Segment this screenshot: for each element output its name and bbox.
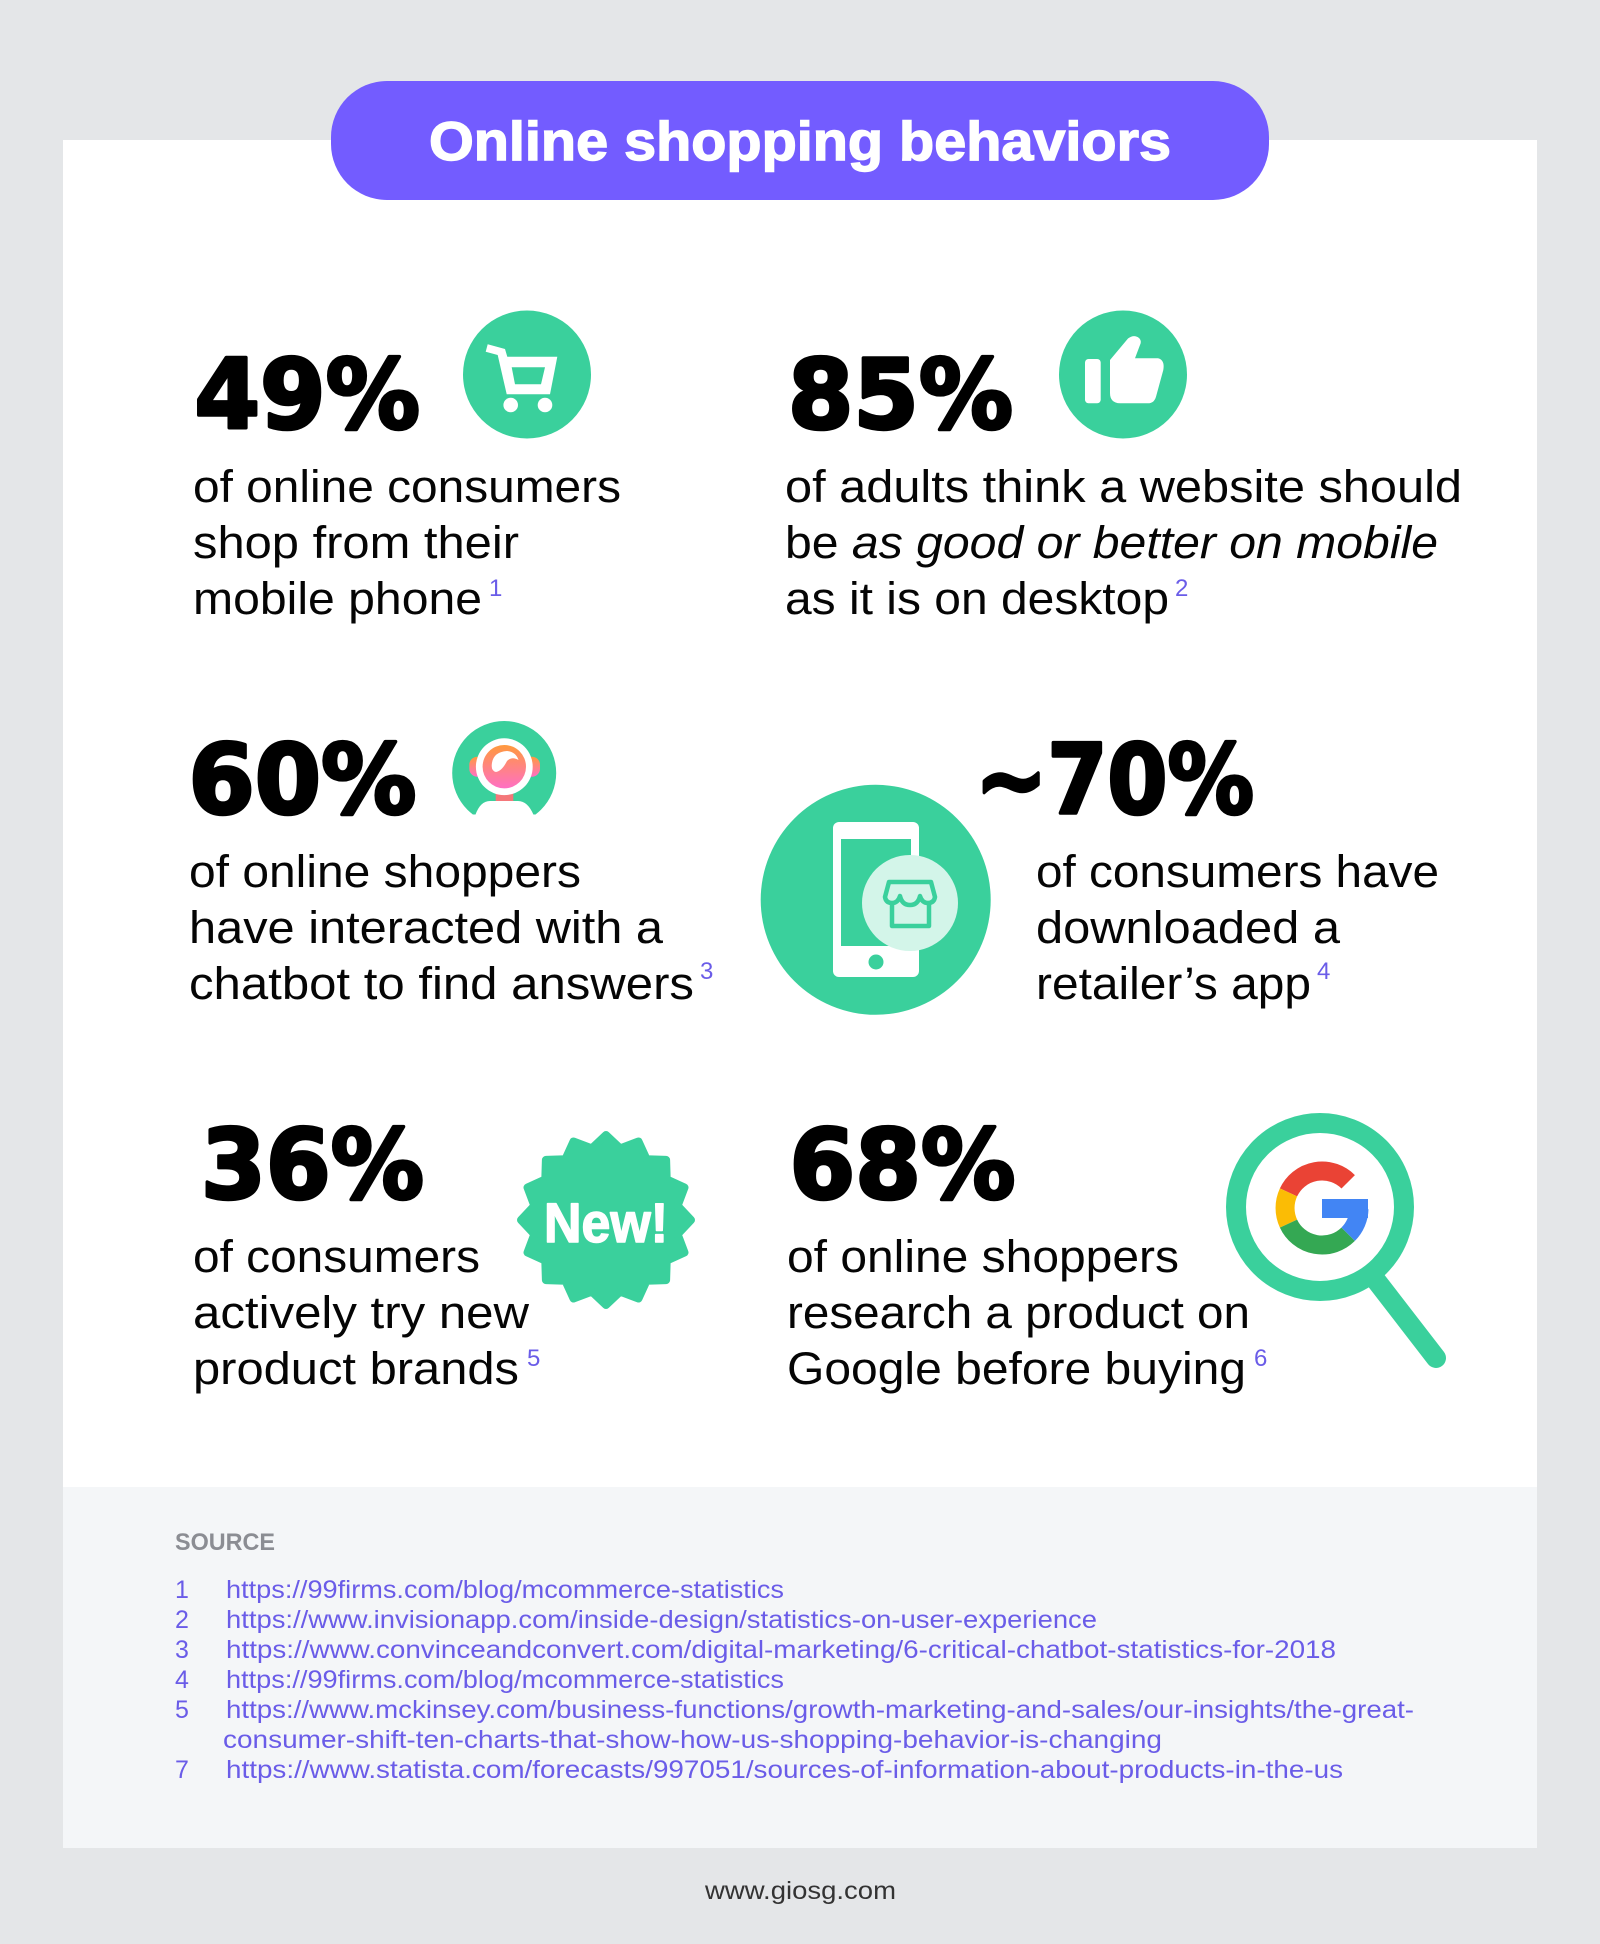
source list: https://99firms.com/blog/mcommerce-statistics xyxy=(226,1576,784,1604)
stat number: 85%: 85% xyxy=(788,339,1013,451)
description: 4 xyxy=(1317,958,1330,985)
description: have interacted with a xyxy=(189,902,664,953)
stat number: 68%: 68% xyxy=(790,1109,1016,1221)
source list: consumer-shift-ten-charts-that-show-how-us-shopping-behavior-is-changing xyxy=(223,1726,1162,1754)
stat number: 60%: 60% xyxy=(188,724,416,836)
source list: 4 xyxy=(175,1666,189,1694)
icon: magnifier with Google G xyxy=(1236,1123,1436,1358)
description xyxy=(193,461,621,624)
description: of online shoppers xyxy=(189,846,581,897)
description: mobile phone xyxy=(193,573,482,624)
description: actively try new xyxy=(193,1287,530,1338)
stat: 49% mobile shoppers xyxy=(193,310,621,624)
stat: 36% new brands xyxy=(193,1109,691,1394)
icon: shopping cart xyxy=(463,310,591,438)
description: as it is on desktop xyxy=(785,573,1169,624)
description: of adults think a website should xyxy=(785,461,1462,512)
description: product brands xyxy=(193,1343,519,1394)
description: of online shoppers xyxy=(787,1231,1179,1282)
title banner: Online shopping behaviors xyxy=(429,110,1171,172)
description: downloaded a xyxy=(1036,902,1341,953)
source list: https://www.statista.com/forecasts/997051/sources-of-information-about-products-in-the-us xyxy=(226,1756,1343,1784)
description: of online consumers xyxy=(193,461,621,512)
description: 3 xyxy=(700,958,713,985)
source list: https://www.convinceandconvert.com/digital-marketing/6-critical-chatbot-statistics-for-2018 xyxy=(226,1636,1336,1664)
stat: 60% chatbot xyxy=(188,721,713,1009)
icon: new badge: New! xyxy=(544,1191,668,1254)
description xyxy=(787,1231,1267,1394)
source heading: SOURCE xyxy=(175,1529,275,1556)
source list: 7 xyxy=(175,1756,189,1784)
stat number: 36%: 36% xyxy=(201,1109,424,1221)
description: chatbot to find answers xyxy=(189,958,694,1009)
description xyxy=(193,1231,540,1394)
description: 6 xyxy=(1254,1345,1267,1372)
stat: 85% mobile parity xyxy=(785,310,1462,624)
description: 5 xyxy=(527,1345,540,1372)
icon: thumbs up xyxy=(1059,310,1187,438)
icon: new badge xyxy=(521,1135,691,1305)
description: retailer’s app xyxy=(1036,958,1311,1009)
source list xyxy=(175,1576,1414,1784)
description: of consumers have xyxy=(1036,846,1439,897)
footer website: www.giosg.com xyxy=(704,1877,896,1905)
source list: 5 xyxy=(175,1696,189,1724)
description: of consumers xyxy=(193,1231,480,1282)
stat: 68% Google research xyxy=(787,1109,1436,1394)
source list: https://99firms.com/blog/mcommerce-statistics xyxy=(226,1666,784,1694)
source list: https://www.mckinsey.com/business-functions/growth-marketing-and-sales/our-insights/the-great- xyxy=(226,1696,1414,1724)
description: 1 xyxy=(489,575,502,602)
description: research a product on xyxy=(787,1287,1250,1338)
description xyxy=(1036,846,1439,1009)
description xyxy=(189,846,713,1009)
source list: https://www.invisionapp.com/inside-design/statistics-on-user-experience xyxy=(226,1606,1097,1634)
description xyxy=(785,461,1462,624)
description: shop from their xyxy=(193,517,519,568)
source list: 3 xyxy=(175,1636,189,1664)
description: be as good or better on mobile xyxy=(785,517,1438,568)
stat: ~70% retailer app xyxy=(761,724,1439,1015)
description: 2 xyxy=(1175,575,1188,602)
icon: phone with store xyxy=(761,785,991,1015)
stat number: ~70%: ~70% xyxy=(975,724,1254,836)
icon: chatbot avatar xyxy=(452,721,556,825)
stat number: 49%: 49% xyxy=(194,339,420,451)
panel: sources background xyxy=(63,1487,1537,1848)
title banner xyxy=(331,81,1269,200)
source list: 2 xyxy=(175,1606,189,1634)
source list: 1 xyxy=(175,1576,189,1604)
description: Google before buying xyxy=(787,1343,1246,1394)
